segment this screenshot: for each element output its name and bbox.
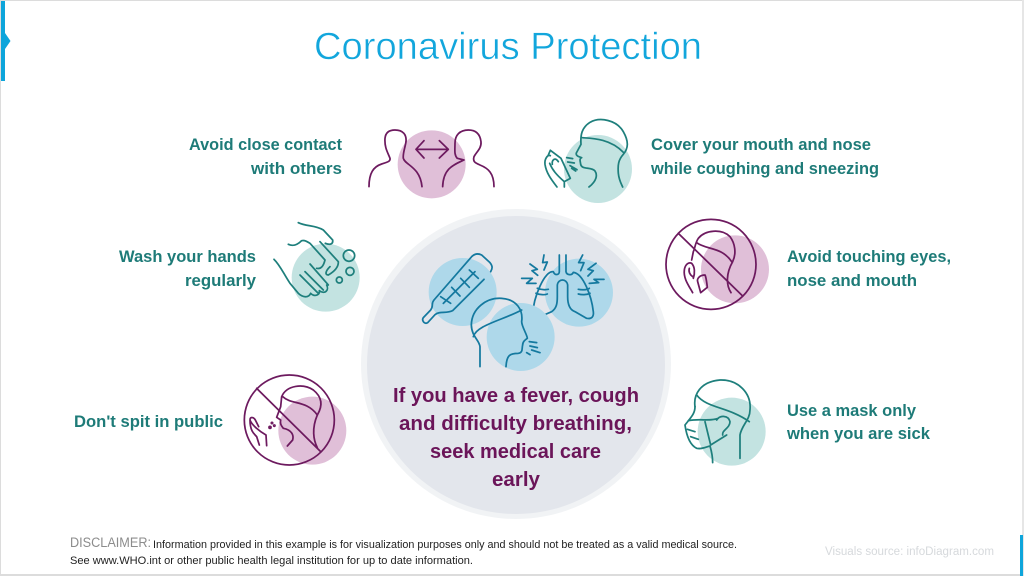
- panel: cover mouth: [545, 120, 879, 203]
- accent: bottom right bar: [1020, 535, 1023, 576]
- disclaimer: DISCLAIMER:: [70, 535, 151, 550]
- panel: avoid close contact: [189, 130, 494, 198]
- text: cover mouth and nose: while coughing and sneezing: [650, 159, 879, 178]
- panel: avoid touching face: [666, 219, 951, 309]
- panel: central warning circle: [361, 209, 671, 519]
- text: avoid close contact: Avoid close contact: [189, 135, 342, 154]
- text: cover mouth and nose: Cover your mouth and nose: [651, 135, 871, 154]
- icon: two people with arrow: [369, 130, 494, 198]
- icon: coughing head and hand: [545, 120, 632, 203]
- text: avoid close contact: with others: [250, 159, 342, 178]
- text: care message: early: [492, 469, 541, 491]
- text: avoid touching: [787, 247, 951, 290]
- text: avoid close contact: [189, 135, 342, 178]
- icon: lungs: [522, 255, 613, 327]
- text: wash your hands: Wash your hands: [119, 247, 256, 266]
- text: use a mask: [786, 401, 931, 443]
- panel: wash hands: [119, 223, 360, 312]
- text: don't spit in public: Don't spit in public: [74, 412, 223, 431]
- disclaimer: [70, 535, 737, 567]
- text: care message: [393, 385, 639, 491]
- accent: left marker: [1, 1, 10, 81]
- text: care message: and difficulty breathing,: [399, 413, 632, 435]
- text: use a mask: when you are sick: [786, 424, 931, 443]
- text: wash your hands: [119, 247, 257, 290]
- text: care message: seek medical care: [430, 441, 601, 463]
- disclaimer: Information provided in this example is for visualization purposes only and should not be treated as a valid medical source.: [153, 539, 737, 551]
- text: avoid touching: Avoid touching eyes,: [787, 247, 951, 266]
- panel: use a mask: [685, 380, 931, 466]
- icon: crossed spitting face: [244, 375, 346, 465]
- icon: crossed face touching: [666, 219, 769, 309]
- panel: don't spit: [74, 375, 346, 465]
- disclaimer: See www.WHO.int or other public health legal institution for up to date information.: [70, 555, 473, 567]
- icon: head with breath: [471, 298, 555, 371]
- text: care message: If you have a fever, cough: [393, 385, 639, 407]
- icon: thermometer: [423, 254, 497, 326]
- text: use a mask: Use a mask only: [787, 401, 917, 420]
- source credit: Visuals source: infoDiagram.com: [825, 546, 994, 558]
- icon: washing hands with bubbles: [274, 223, 360, 312]
- icon: head with mask: [685, 380, 766, 466]
- text: avoid touching: nose and mouth: [787, 271, 917, 290]
- title: Coronavirus Protection: [314, 26, 702, 68]
- text: cover mouth and nose: [650, 135, 879, 178]
- text: wash your hands: regularly: [185, 271, 257, 290]
